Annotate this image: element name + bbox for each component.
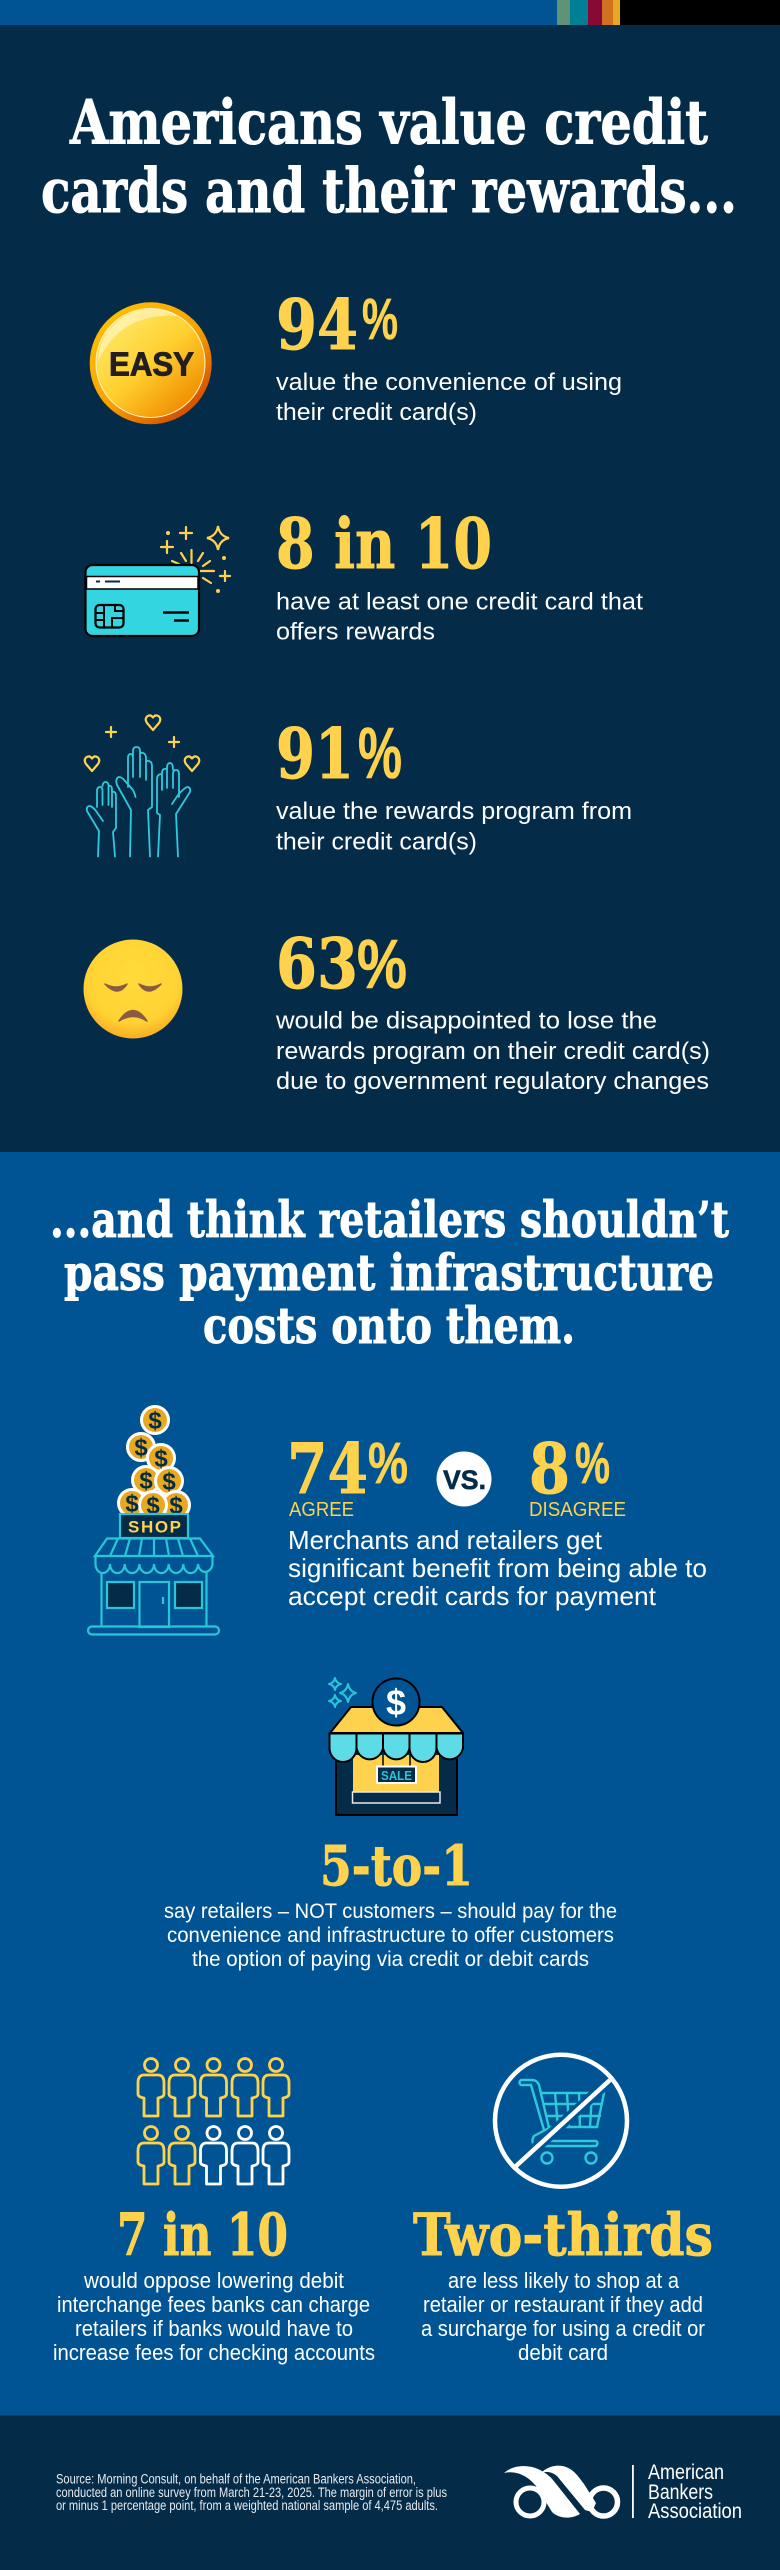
icon: easy button: EASY [109, 346, 194, 383]
logo: American Bankers Association: Association [648, 2500, 742, 2523]
icon: shop with coins [88, 1406, 219, 1634]
block: 5-to-1 [164, 1678, 617, 1971]
icon: sale store with dollar coin: $ [386, 1682, 406, 1723]
source note [56, 2472, 447, 2513]
icon: credit card with sparkles [86, 526, 230, 636]
number: 91%: % [358, 714, 402, 794]
text: say retailers [164, 1900, 617, 1971]
text: value the rewards program [276, 798, 632, 856]
text: merchants and retailers: Merchants and retailers get [288, 1525, 603, 1555]
icon: shopping cart prohibited [495, 2055, 627, 2187]
text: have at least one credit card [276, 588, 643, 646]
icon: shop with coins: SHOP [128, 1518, 181, 1536]
icon: shop with coins: $ [169, 1492, 183, 1520]
top colour bar [0, 0, 780, 25]
source note: or minus 1 percentage point, from a weighted national sample of 4,475 adults. [56, 2498, 438, 2513]
text: say retailers: the option of paying via credit or debit cards [192, 1948, 589, 1971]
text: merchants and retailers: significant benefit from being able to [288, 1553, 707, 1583]
number: 8 in 10: 8 in 10 [276, 504, 492, 585]
number: 74% agree: % [368, 1431, 408, 1496]
stat row: 63% disappointed [84, 924, 710, 1095]
text: are less likely: retailer or restaurant if they add [423, 2292, 703, 2317]
text: would be disappointed: rewards program on their credit card(s) [276, 1038, 710, 1065]
number: 63%: 63 [276, 924, 358, 1005]
icon: shop with coins: $ [125, 1490, 139, 1518]
text: are less likely: are less likely to shop at a [448, 2268, 680, 2293]
number: 8% disagree: 8 [529, 1429, 570, 1510]
text: value the convenience [276, 369, 622, 426]
text: value the rewards program: value the rewards program from [276, 798, 632, 825]
text: are less likely: a surcharge for using a credit or [421, 2316, 705, 2341]
text: value the convenience: value the convenience of using [276, 369, 622, 396]
icon: shop with coins: $ [146, 1492, 160, 1520]
icon: raised hands with hearts [85, 715, 199, 856]
logo: American Bankers Association: American [648, 2461, 724, 2484]
stat row: 91% rewards program [85, 714, 632, 856]
text: have at least one credit card: offers rewards [276, 618, 435, 646]
icon: shop with coins: $ [148, 1408, 162, 1434]
icon: sale store with dollar coin [329, 1678, 463, 1815]
icon: easy button [90, 302, 212, 424]
icon: sale store with dollar coin: SALE [381, 1768, 412, 1783]
background: dark upper panel [0, 0, 780, 1152]
badge: vs: VS. [443, 1465, 486, 1495]
block: two-thirds [413, 2055, 713, 2365]
icon: shop with coins: $ [139, 1468, 153, 1494]
text: would oppose lowering: interchange fees banks can charge [57, 2292, 370, 2317]
background: blue middle panel [0, 1152, 780, 2416]
icon: sad face emoji [84, 940, 182, 1038]
text: would be disappointed [275, 1008, 710, 1095]
number: two-thirds: Two-thirds [413, 2201, 713, 2269]
block: 7 in 10 [53, 2058, 375, 2365]
text: have at least one credit card: have at least one credit card that [276, 588, 643, 616]
number: 5-to-1: 5-to-1 [320, 1833, 473, 1898]
text: would be disappointed: due to government regulatory changes [276, 1068, 709, 1095]
number: 8% disagree: % [575, 1431, 610, 1496]
background: dark footer panel [0, 2416, 780, 2570]
text: would be disappointed: would be disappointed to lose the [275, 1008, 657, 1034]
text: value the rewards program: their credit card(s) [276, 828, 477, 856]
number: 94%: 94 [276, 285, 358, 366]
text: value the convenience: their credit card(s) [276, 399, 477, 426]
icon: ten people outline [138, 2058, 289, 2184]
stat row: 8 in 10 rewards card [86, 504, 643, 646]
number: 8% disagree [529, 1429, 626, 1521]
logo: American Bankers Association: Bankers [648, 2481, 713, 2504]
text: would oppose lowering: retailers if banks would have to [75, 2316, 353, 2341]
badge: vs [436, 1452, 492, 1506]
number: 63%: % [357, 925, 407, 1003]
heading: and think retailers [50, 1190, 729, 1355]
text: say retailers: say retailers – NOT customers – should pay for the [164, 1900, 617, 1923]
number: 8% disagree: DISAGREE [529, 1499, 626, 1521]
icon: shop with coins: $ [162, 1468, 176, 1496]
icon: shop with coins: $ [134, 1434, 148, 1462]
number: 7 in 10: 7 in 10 [117, 2201, 288, 2269]
icon: shop with coins: $ [154, 1446, 168, 1472]
source note: conducted an online survey from March 21-23, 2025. The margin of error is plus [56, 2485, 447, 2500]
number: 74% agree: 74 [287, 1429, 368, 1510]
stat row: 94% convenience [90, 285, 622, 426]
text: would oppose lowering: increase fees for checking accounts [53, 2340, 375, 2365]
text: are less likely: debit card [518, 2340, 608, 2365]
title: Americans value credit cards [41, 88, 737, 227]
number: 74% agree: AGREE [289, 1499, 354, 1521]
number: 91%: 91 [276, 714, 354, 795]
text: say retailers: convenience and infrastructure to offer customers [167, 1924, 614, 1947]
text: would oppose lowering: would oppose lowering debit [83, 2268, 344, 2293]
number: 74% agree [287, 1429, 408, 1521]
text: would oppose lowering [53, 2268, 375, 2365]
block: 74% vs 8% [88, 1406, 707, 1634]
logo: American Bankers Association [504, 2461, 742, 2523]
source note: Source: Morning Consult, on behalf of the American Bankers Association, [56, 2472, 416, 2486]
number: 94%: % [362, 287, 398, 352]
text: merchants and retailers: accept credit cards for payment [288, 1581, 657, 1611]
text: are less likely [421, 2268, 705, 2365]
text: merchants and retailers [288, 1525, 707, 1611]
heading: and think retailers: costs onto them. [203, 1296, 575, 1355]
